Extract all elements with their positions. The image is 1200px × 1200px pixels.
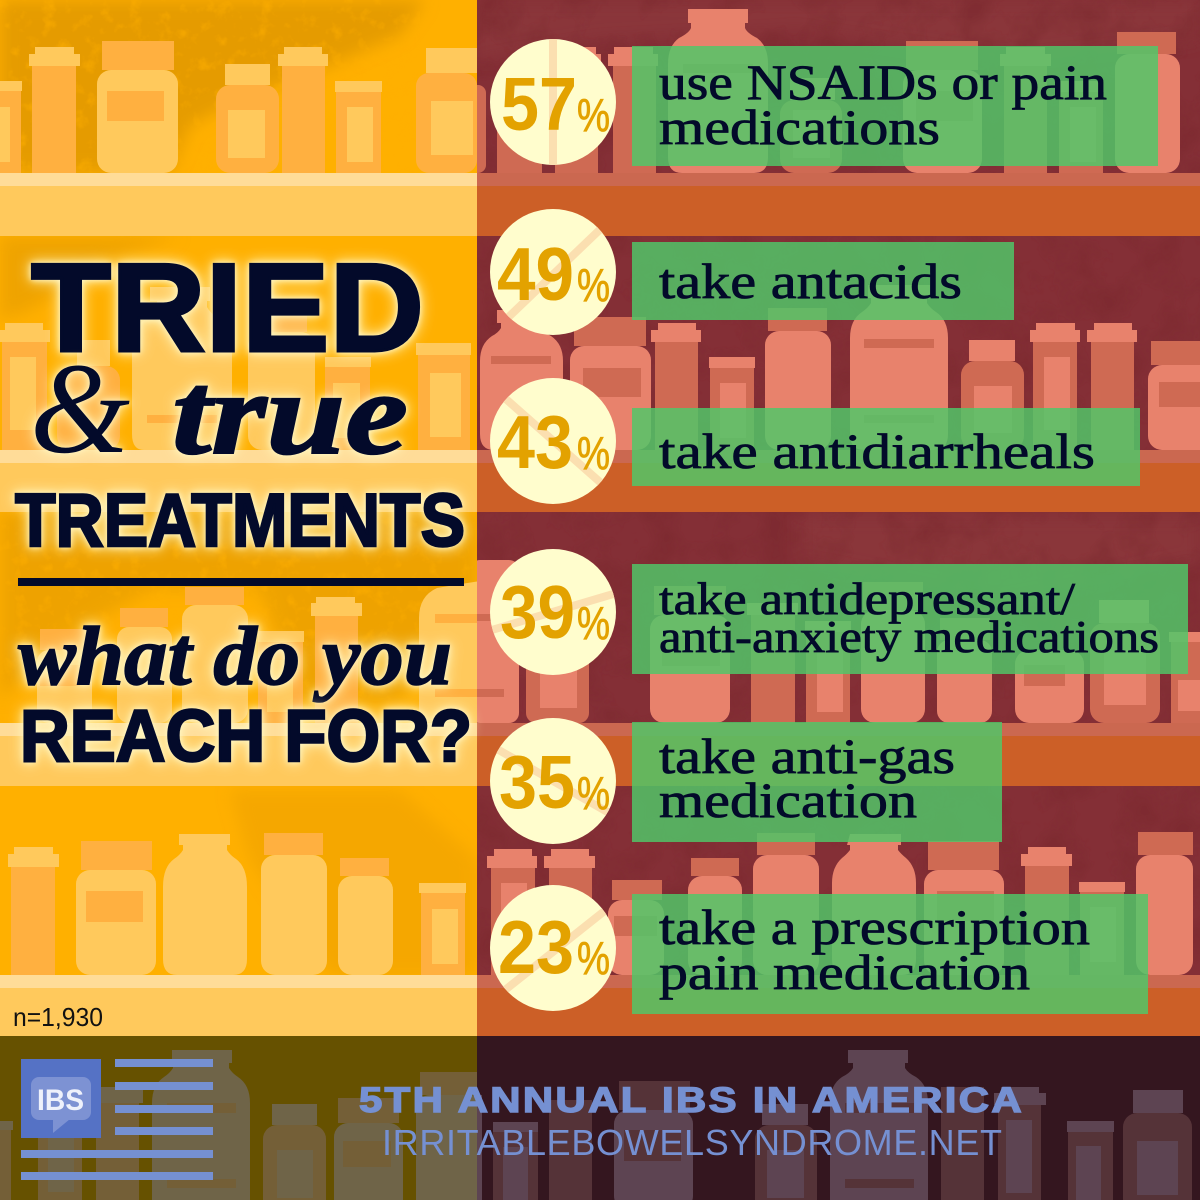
panel: left orange shelves [0, 0, 503, 1036]
row 4 bottles [8, 833, 466, 975]
row 2 bottles [480, 285, 1200, 450]
pill circle 43%: 43 [497, 400, 573, 484]
shelves [477, 173, 1200, 1036]
stat row: 23% prescription [490, 885, 1148, 1014]
stat row: 39% antidepressant [485, 549, 1188, 675]
panel: right maroon shelves [470, 0, 1200, 1036]
logo: IBS flag [21, 1059, 213, 1180]
heading: REACH FOR?: REACH FOR? [20, 696, 472, 777]
pill circle 35% [490, 718, 618, 844]
stat row: 49% antacids [490, 209, 1014, 335]
stat row: 43% antidiarrheals [490, 378, 1140, 504]
stat row: 35% anti-gas [490, 718, 1002, 844]
panel: footer bar right [470, 1036, 1200, 1200]
logo: IBS flag: IBS [37, 1084, 84, 1117]
heading: true: true [172, 348, 408, 479]
pill circle 23% [490, 885, 616, 1011]
label box [632, 564, 1188, 674]
shelves [0, 173, 477, 1036]
pill circle 43%: % [577, 427, 610, 479]
pill circle 57%: 57 [501, 62, 577, 146]
pill circle 49% [490, 209, 616, 335]
label box [632, 894, 1148, 1014]
pill circle 39% [485, 549, 620, 675]
row 3 bottles [37, 582, 477, 723]
label box: use NSAIDs or pain [659, 54, 1107, 110]
label box: medications [659, 99, 940, 155]
label box [632, 242, 1014, 320]
sample size note: n=1,930 [13, 1002, 103, 1032]
label box: anti-anxiety medications [659, 611, 1159, 662]
label box: take antacids [659, 253, 962, 309]
label box: take antidepressant/ [659, 573, 1075, 624]
pill circle 23%: % [577, 932, 610, 984]
pill circle 23%: 23 [498, 905, 574, 989]
footer title: 5TH ANNUAL IBS IN AMERICA [359, 1081, 1024, 1120]
pill circle 39%: % [577, 597, 610, 649]
label box: medication [659, 772, 917, 828]
pill circle 49%: 49 [497, 232, 574, 316]
row 4 bottles [487, 832, 1193, 975]
pill circle 35%: 35 [499, 740, 575, 824]
label box: take a prescription [659, 899, 1090, 955]
stat row: 57% NSAIDs [490, 39, 1158, 166]
pill circle 43% [490, 378, 618, 504]
heading: TRIED: TRIED [31, 237, 424, 378]
pill circle 57% [490, 39, 616, 165]
heading: &: & [30, 337, 130, 481]
row 3 bottles [470, 560, 1200, 723]
label box [632, 722, 1002, 842]
pill circle 57%: % [577, 89, 610, 141]
label box: take antidiarrheals [659, 423, 1095, 479]
row 1 bottles [0, 41, 477, 173]
row 1 bottles [470, 9, 1180, 173]
label box [632, 408, 1140, 486]
pill circle 39%: 39 [500, 570, 575, 654]
heading: TREATMENTS: TREATMENTS [15, 478, 465, 562]
title divider [18, 578, 464, 586]
label box: take anti-gas [659, 728, 955, 784]
footer url: IRRITABLEBOWELSYNDROME.NET [382, 1122, 1002, 1163]
pill circle 35%: % [577, 767, 610, 819]
heading: what do you: what do you [18, 610, 452, 703]
row 2 bottles [0, 287, 471, 450]
title block [15, 237, 472, 777]
label box: pain medication [659, 944, 1030, 1000]
panel: footer bar left [0, 1036, 482, 1200]
pill circle 49%: % [577, 259, 610, 311]
label box [632, 46, 1158, 166]
